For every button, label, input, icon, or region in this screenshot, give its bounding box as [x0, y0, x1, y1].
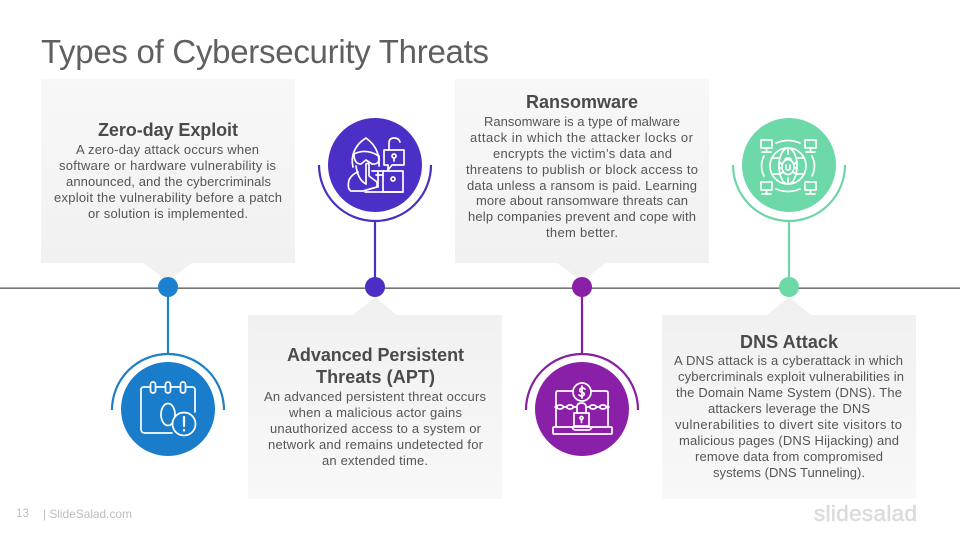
text: Zero-day description: A zero-day attack occurs when	[76, 142, 259, 157]
text: Ransomware description: attack in which the attacker locks or	[470, 130, 694, 145]
title: Types of Cybersecurity Threats	[41, 33, 489, 70]
text: DNS description: attackers leverage the DNS	[708, 401, 870, 416]
text: Zero-day description: announced, and the cybercriminals	[66, 174, 272, 189]
text: APT description: An advanced persistent threat occurs	[264, 389, 486, 404]
heading: Ransomware: Ransomware	[526, 92, 638, 112]
text: Zero-day description	[54, 142, 282, 221]
node: violet connector	[572, 277, 592, 355]
text: Ransomware description: Ransomware is a type of malware	[484, 114, 680, 129]
text: Zero-day description: exploit the vulnerability before a patch	[54, 190, 282, 205]
text: APT description: when a malicious actor gains	[288, 405, 462, 420]
text: APT description: network and remains undetected for	[268, 437, 484, 452]
text: DNS description: systems (DNS Tunneling).	[713, 465, 865, 480]
footer: site name: | SlideSalad.com	[43, 507, 132, 521]
panel: DNS Attack	[662, 297, 916, 499]
text: APT description: an extended time.	[322, 453, 428, 468]
timeline line	[0, 288, 960, 289]
text: Zero-day description: or solution is implemented.	[88, 206, 248, 221]
text: Ransomware description: help companies prevent and cope with	[468, 209, 696, 224]
text: DNS description: remove data from compromised	[695, 449, 883, 464]
text: Ransomware description: more about ransomware threats can	[476, 193, 688, 208]
text: DNS description	[674, 353, 904, 480]
heading: Zero-day Exploit: Zero-day Exploit	[98, 120, 238, 140]
icon: hacker with laptop	[319, 118, 431, 221]
text: APT description	[264, 389, 486, 468]
text: DNS description: cybercriminals exploit vulnerabilities in	[678, 369, 904, 384]
heading: Advanced Persistent Threats	[287, 345, 464, 387]
text: DNS description: the Domain Name System (DNS). The	[676, 385, 902, 400]
text: DNS description: malicious pages (DNS Hijacking) and	[679, 433, 899, 448]
text: Ransomware description	[466, 114, 698, 240]
text: DNS description: vulnerabilities to divert site visitors to	[675, 417, 902, 432]
panel: Advanced Persistent Threats	[248, 297, 502, 499]
icon: globe network with bug	[733, 118, 845, 221]
text: Ransomware description: data unless a ransom is paid. Learning	[467, 178, 697, 193]
icon: calendar with alert	[112, 354, 224, 456]
node: green connector	[779, 221, 799, 297]
text: APT description: unauthorized access to a system or	[270, 421, 482, 436]
node: blue connector	[158, 277, 178, 355]
text: Ransomware description: encrypts the victim’s data and	[493, 146, 672, 161]
text: Ransomware description: them better.	[546, 225, 618, 240]
footer: page number: 13	[16, 508, 29, 520]
heading: DNS Attack: DNS Attack	[740, 332, 839, 352]
text: Ransomware description: threatens to publish or block access to	[466, 162, 698, 177]
text: Zero-day description: software or hardware vulnerability is	[59, 158, 276, 173]
panel: Zero-day Exploit	[41, 79, 295, 281]
icon: ransomware laptop	[526, 354, 638, 456]
panel: Ransomware	[455, 79, 709, 281]
heading: Advanced Persistent Threats: Advanced Persistent	[287, 345, 464, 365]
text: DNS description: A DNS attack is a cyberattack in which	[674, 353, 903, 368]
heading: Advanced Persistent Threats: Threats (APT)	[316, 367, 435, 387]
logo: slidesalad: slidesalad	[814, 501, 917, 526]
node: purple connector	[365, 221, 385, 297]
